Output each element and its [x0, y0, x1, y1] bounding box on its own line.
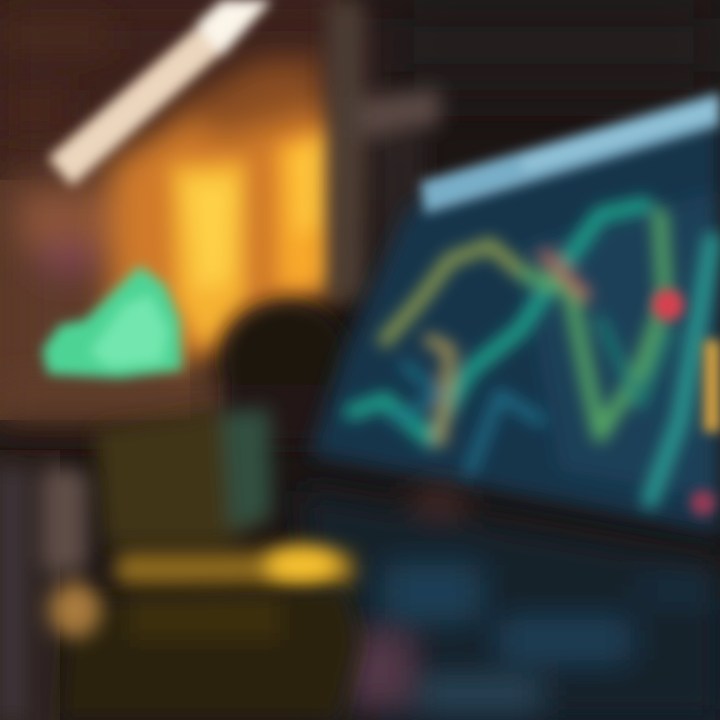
light: white ceiling strip [48, 0, 272, 186]
beam: grey post [328, 0, 440, 320]
object: olive cup [95, 408, 272, 545]
object: left grey figure [0, 468, 101, 720]
monitor: light blue top bar [420, 92, 720, 214]
desk: keyboard area [300, 490, 720, 720]
background: room shading [0, 0, 720, 420]
light: yellow glare [264, 546, 340, 586]
chart: red marker [652, 289, 684, 321]
wall: brick tones upper left [0, 20, 260, 446]
object: dark olive base [60, 588, 360, 720]
panel: orange lit window [110, 60, 335, 365]
chart: green mound on small screen [42, 266, 182, 378]
object: gold tray with highlight [115, 546, 355, 586]
chart: coloured lines [352, 205, 712, 500]
light: yellow column left [170, 160, 246, 350]
panel: monitor with chart lines [310, 92, 720, 535]
silhouette: dark figure [221, 300, 349, 445]
light: yellow column right [276, 128, 332, 290]
chart: red marker low [690, 490, 716, 516]
chart: yellow marker at edge [704, 340, 720, 432]
